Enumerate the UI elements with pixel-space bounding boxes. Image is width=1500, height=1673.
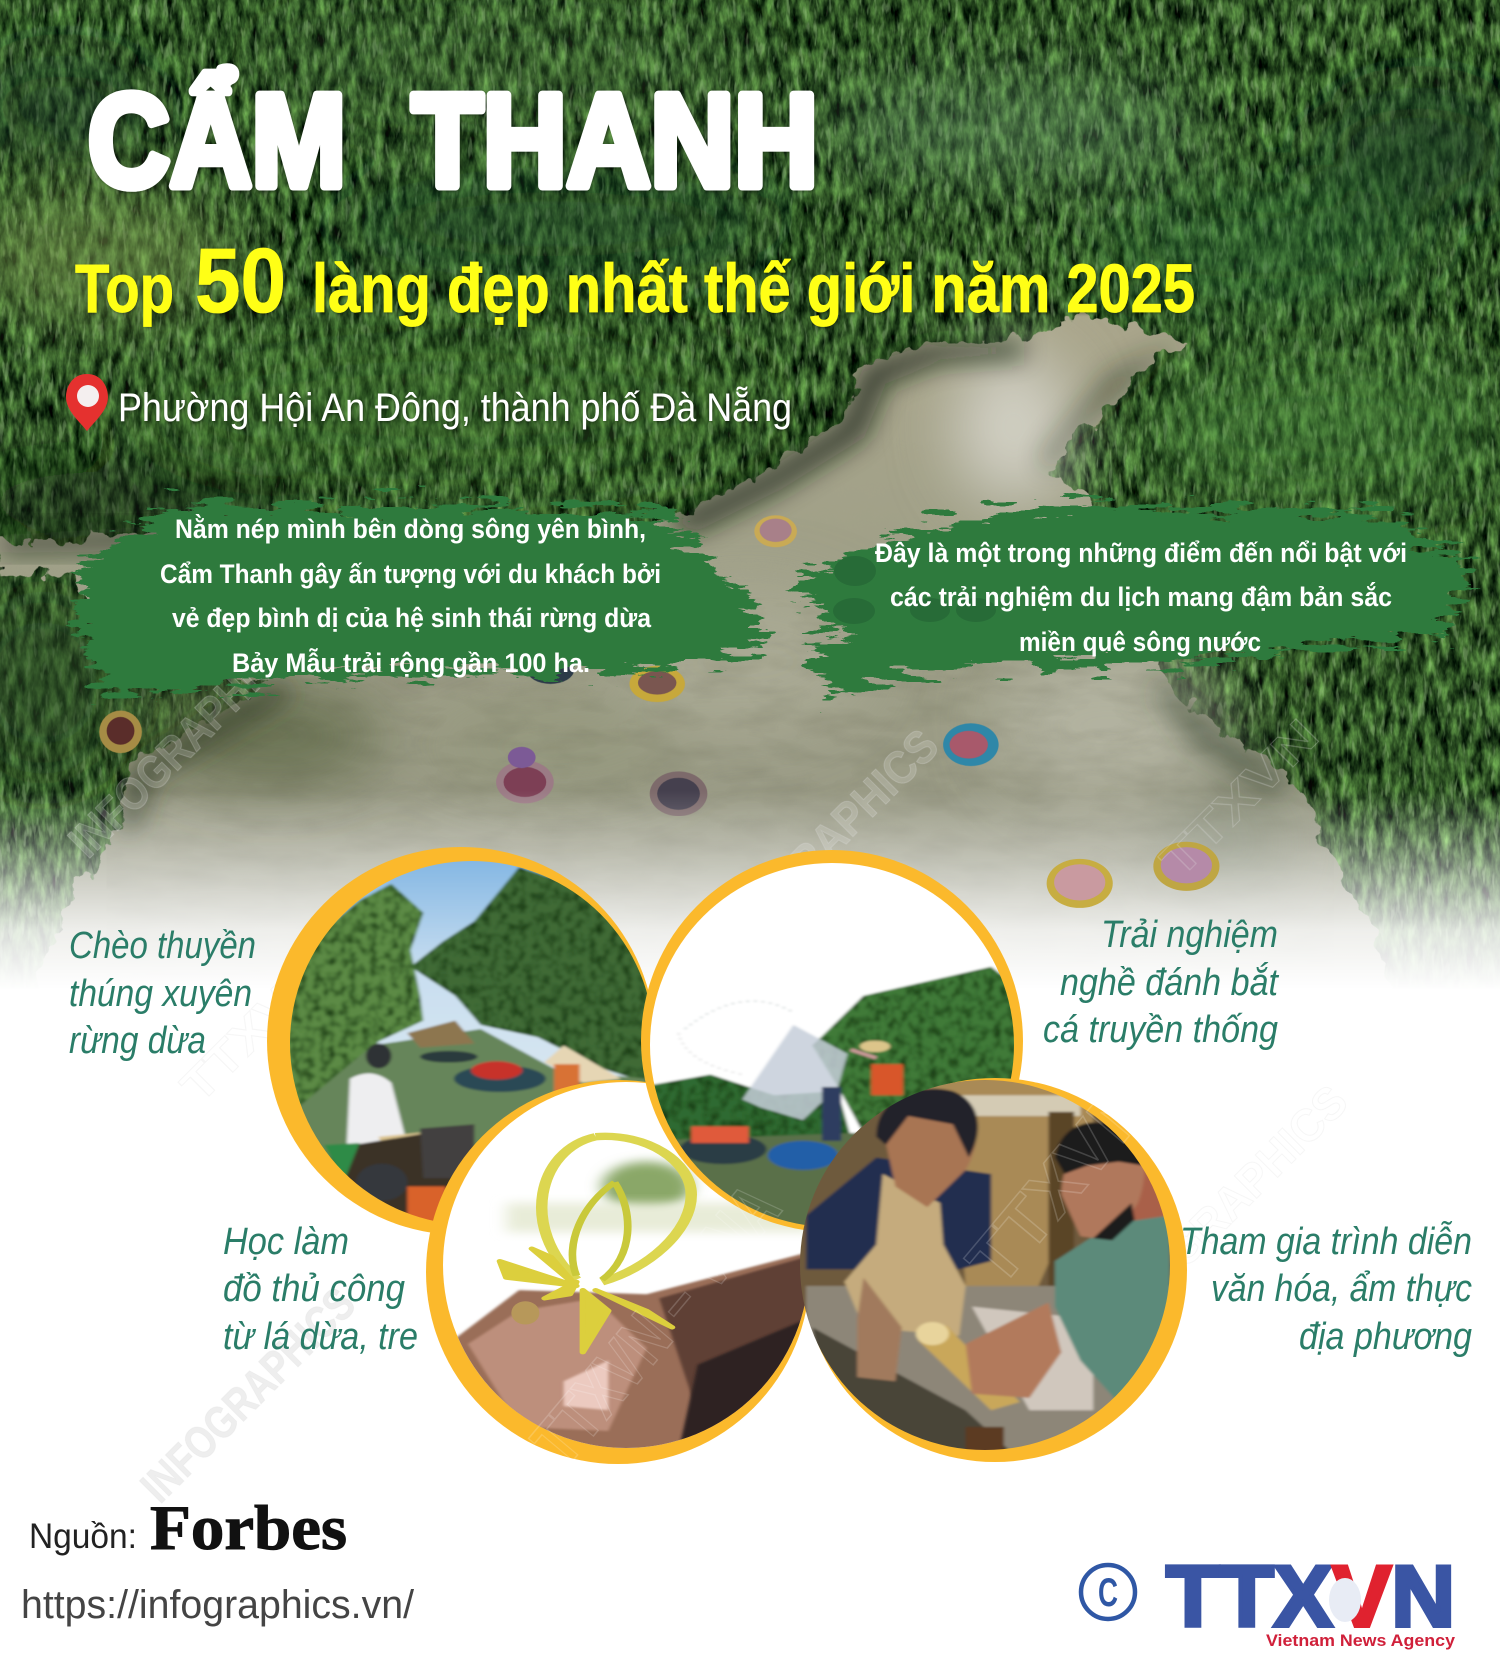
panel: right green intro band: Đây là một trong những điểm đến nổi bật với [875,538,1407,568]
panel: left green intro band [75,505,765,695]
label: culture and cuisine: địa phương [1299,1316,1472,1358]
label: boating: rừng dừa [69,1020,206,1062]
subtitle: Top [75,250,174,327]
white fade at bottom of photo [0,790,1500,990]
source: Forbes [150,1493,347,1563]
watermarks: INFOGRAPHICS [130,1277,365,1512]
label: culture and cuisine: văn hóa, ẩm thực [1211,1268,1472,1310]
label: handicraft [223,1221,418,1358]
photo circle: traditional cast-net fishing [641,850,1023,1230]
watermarks over photos: TTXVN – VNA [517,1169,795,1480]
title: CẨM [88,67,346,214]
logo: TTXVN: C [1098,1571,1118,1615]
label: culture and cuisine [1180,1219,1472,1358]
subtitle: làng đẹp nhất thế giới năm 2025 [312,250,1195,327]
label: handicraft: từ lá dừa, tre [223,1316,418,1358]
river [0,313,1398,1024]
icon: map pin [66,374,108,431]
label: culture and cuisine: Tham gia trình diễn [1180,1219,1472,1263]
subtitle: 50 [195,230,286,332]
watermarks [58,618,1357,1512]
label: boating [69,925,256,1062]
watermarks: TTXVN [170,948,334,1112]
forest light and dark patches [0,16,1500,779]
river bank shadows [661,341,1024,533]
watermarks: TTXVN [1150,709,1328,887]
logo: TTXVN: TTXVN [1166,1549,1455,1645]
panel: left green intro band: Nằm nép mình bên dòng sông yên bình, [175,513,646,544]
panel: left green intro band: Cẩm Thanh gây ấn tượng với du khách bởi [160,559,661,589]
watermarks: INFOGRAPHICS [685,719,948,982]
photo circle: artisan teaching bamboo craft [793,1075,1189,1468]
label: fishing: Trải nghiệm [1101,914,1278,956]
panel: right green intro band: miền quê sông nước [1019,627,1261,657]
photo circle: palm leaf and bamboo craft ring [426,1080,806,1464]
coracle boats [99,515,999,816]
watermarks over photos: TTXVN [952,1066,1166,1300]
location: Phường Hội An Đông, thành phố Đà Nẵng [118,385,792,430]
website url: https://infographics.vn/ [21,1583,415,1627]
watermarks: INFOGRAPHICS [58,618,307,867]
panel: left green intro band: Bảy Mẫu trải rộng gần 100 ha. [232,647,590,678]
subtitle [75,230,1195,332]
label: fishing: nghề đánh bắt [1060,961,1279,1004]
source [29,1493,347,1563]
label: handicraft: Học làm [223,1221,349,1263]
label: boating: Chèo thuyền [69,925,256,967]
logo: TTXVN: Vietnam News Agency [1266,1631,1456,1650]
label: boating: thúng xuyên [69,973,252,1015]
title: THANH [412,67,818,214]
label: handicraft: đồ thủ công [223,1268,405,1310]
panel: right green intro band [795,503,1470,695]
panel: right green intro band: các trải nghiệm du lịch mang đậm bản sắc [890,581,1392,612]
photo circle: coracle boats through palm forest [264,847,678,1244]
source: Nguồn: [29,1517,137,1556]
title [88,67,818,214]
label: fishing: cá truyền thống [1043,1009,1278,1051]
label: fishing [1043,914,1279,1051]
watermarks: INFOGRAPHICS [1080,1075,1357,1352]
coracle boats above the fade [1047,842,1219,908]
watermarks over photos [517,1066,1166,1480]
panel: left green intro band: vẻ đẹp bình dị của hệ sinh thái rừng dừa [172,603,652,633]
